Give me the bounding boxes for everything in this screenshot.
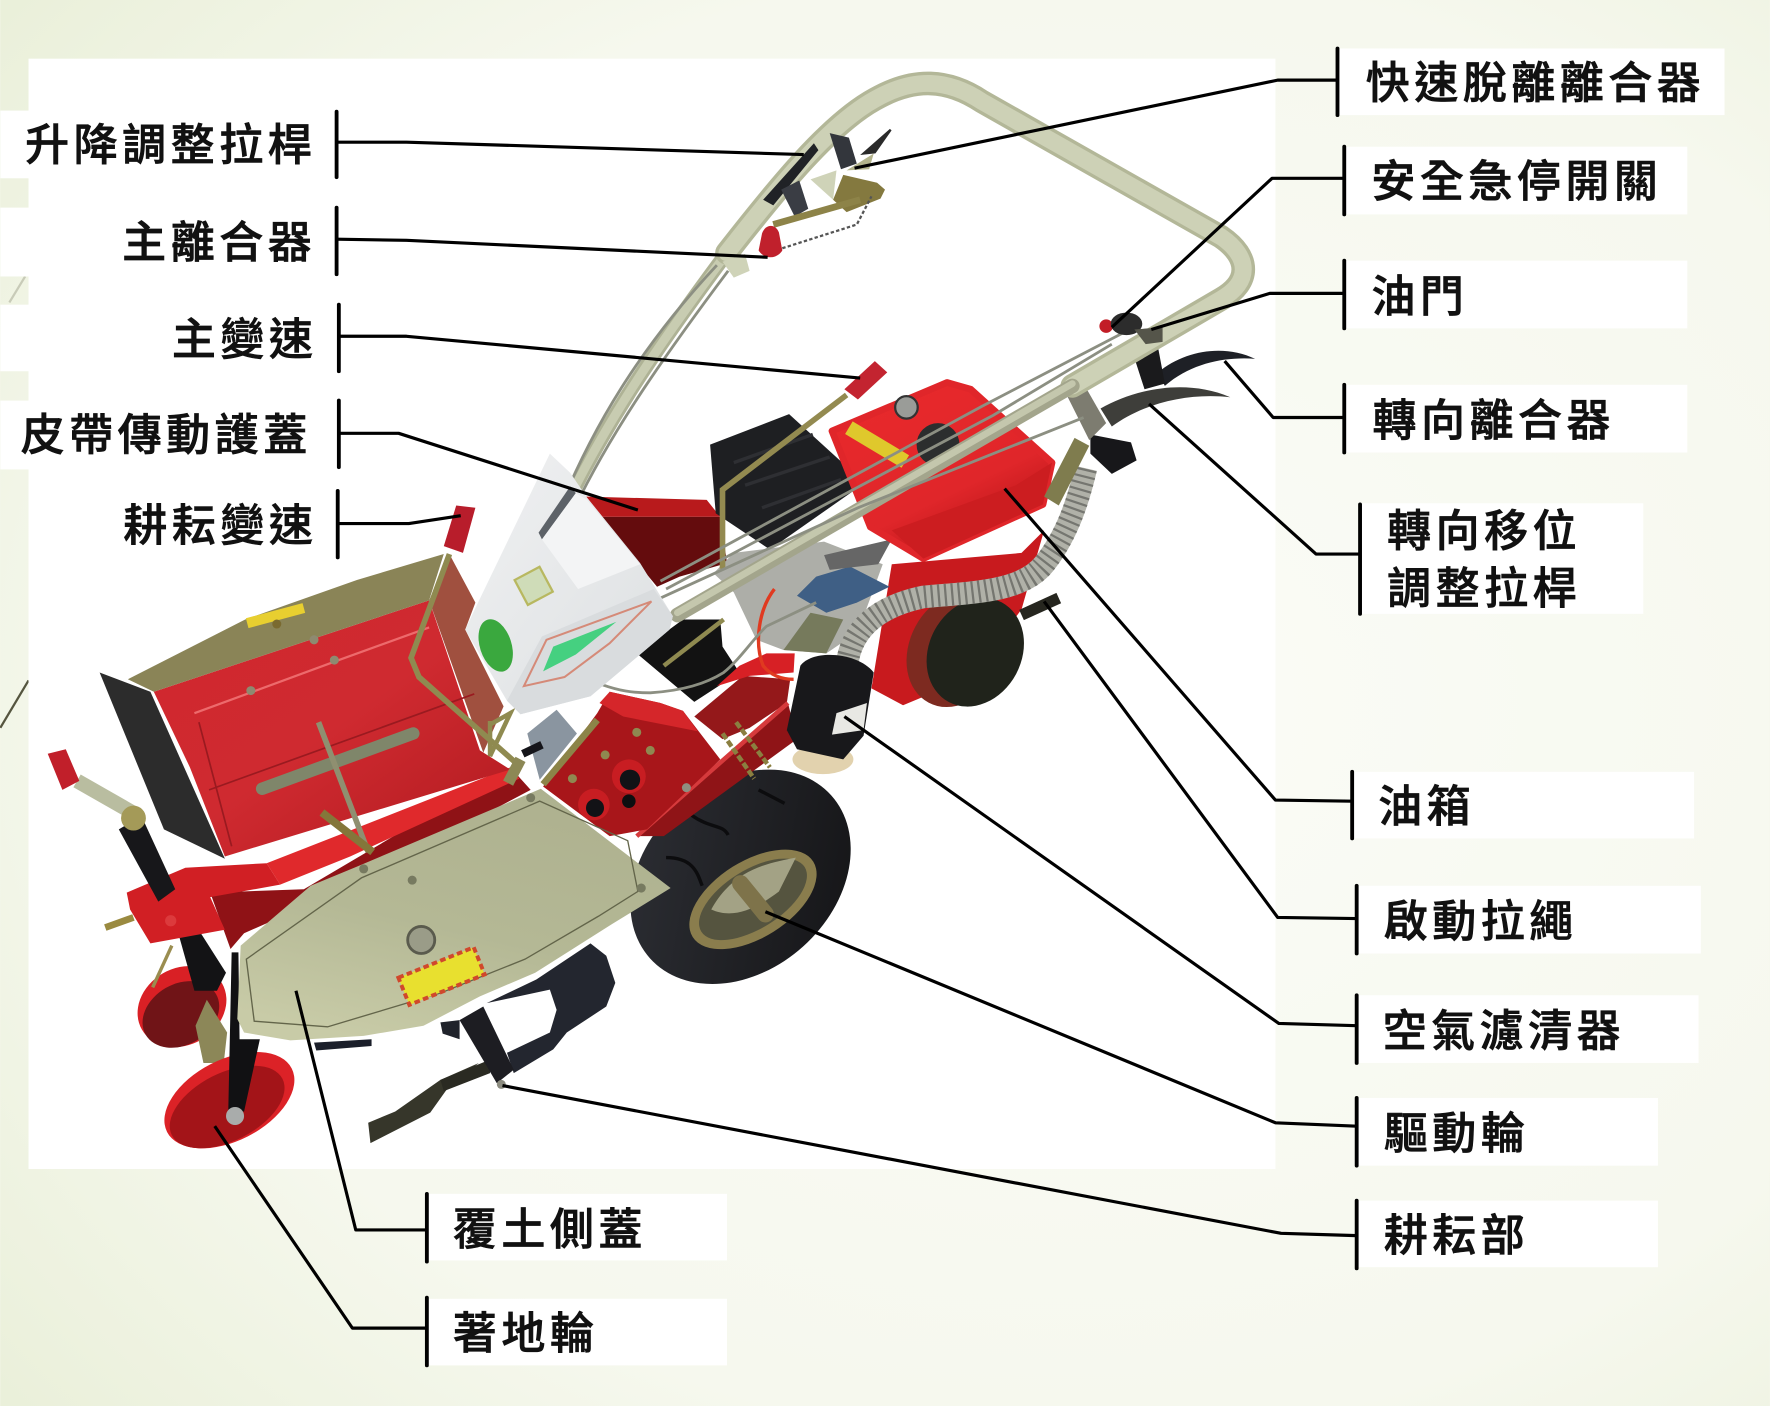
red ground wheel	[149, 1032, 310, 1168]
label: 轉向移位調整拉桿	[1149, 404, 1643, 614]
gearbox plate	[508, 692, 720, 836]
label: 安全急停開關: 安全急停開關	[1371, 157, 1662, 206]
label: 快速脫離離合器	[855, 49, 1725, 168]
engine block	[713, 530, 1044, 705]
black rubber tine guard	[314, 943, 615, 1073]
label: 升降調整拉桿: 升降調整拉桿	[25, 121, 316, 170]
label: 主變速: 主變速	[172, 315, 317, 364]
label: 覆土側蓋	[296, 991, 727, 1262]
fuel filter canister	[787, 655, 874, 774]
label: 空氣濾清器: 空氣濾清器	[1383, 1007, 1625, 1056]
illustration: tiller machine	[48, 83, 1255, 1168]
label: 覆土側蓋: 覆土側蓋	[453, 1206, 647, 1255]
tilling shift lever	[411, 506, 517, 764]
label: 油門: 油門	[1371, 272, 1468, 321]
main wheel	[587, 726, 894, 1028]
main shift lever	[723, 361, 887, 569]
control cables	[562, 265, 1123, 693]
rear crank handle	[48, 749, 175, 902]
corrugated air hose	[847, 468, 1086, 669]
label: 油門	[1151, 261, 1687, 329]
label: 主變速	[0, 305, 860, 378]
black air box	[710, 414, 865, 550]
label: 轉向離合器: 轉向離合器	[1372, 397, 1615, 446]
label: 空氣濾清器	[844, 717, 1699, 1063]
side cover	[237, 789, 671, 1040]
label: 轉向移位調整拉桿: 轉向移位	[1387, 507, 1581, 556]
rear hood: red face	[154, 600, 510, 856]
label: 耕耘部: 耕耘部	[1384, 1211, 1529, 1260]
label: 皮帶傳動護蓋	[0, 401, 638, 510]
label: 皮帶傳動護蓋: 皮帶傳動護蓋	[21, 411, 312, 460]
olive bracket	[1044, 438, 1089, 506]
red frame rails	[637, 653, 797, 836]
label: 油箱: 油箱	[1378, 782, 1475, 831]
label: 驅動輪	[765, 912, 1658, 1166]
dark transmission block	[637, 619, 739, 702]
black rear flap	[100, 673, 225, 859]
label: 快速脫離離合器: 快速脫離離合器	[1366, 59, 1705, 108]
ground wheel strut	[226, 952, 260, 1125]
label: 主離合器: 主離合器	[122, 218, 316, 267]
small red rear wheel	[123, 950, 241, 1063]
belt cover	[584, 497, 727, 587]
steering clutch levers	[1067, 348, 1255, 474]
label: 轉向離合器	[1225, 361, 1687, 452]
label: 轉向移位調整拉桿: 調整拉桿	[1387, 565, 1581, 614]
white picture panel	[29, 59, 1275, 1169]
air cleaner disc	[887, 573, 1059, 725]
gold link rod	[664, 619, 724, 666]
white console cover	[465, 454, 673, 714]
red rear frame beam	[105, 767, 531, 949]
handlebar tube	[570, 83, 1243, 615]
label: 驅動輪: 驅動輪	[1384, 1110, 1529, 1159]
rear strut and link	[153, 920, 226, 991]
olive adjusting bar	[262, 722, 413, 852]
gold gauge-wheel bracket	[196, 1000, 227, 1063]
fuel tank	[832, 383, 1052, 559]
label: 升降調整拉桿	[0, 111, 804, 178]
tilling blades and shaft	[368, 1007, 514, 1143]
label: 著地輪: 著地輪	[453, 1309, 598, 1358]
label: 啟動拉繩	[1044, 601, 1701, 954]
handle control cluster	[723, 130, 891, 278]
label: 安全急停開關	[1112, 147, 1687, 327]
rear hood: brown side	[429, 556, 504, 753]
label: 耕耘部	[502, 1086, 1658, 1268]
rear hood: olive top	[128, 554, 444, 692]
label: 啟動拉繩: 啟動拉繩	[1384, 898, 1578, 947]
label: 油箱	[1005, 489, 1694, 838]
label: 著地輪	[215, 1126, 727, 1365]
label: 主離合器	[0, 208, 768, 276]
label: 耕耘變速: 耕耘變速	[123, 502, 317, 551]
safety stop switch	[1099, 313, 1163, 344]
label: 耕耘變速	[123, 491, 461, 557]
